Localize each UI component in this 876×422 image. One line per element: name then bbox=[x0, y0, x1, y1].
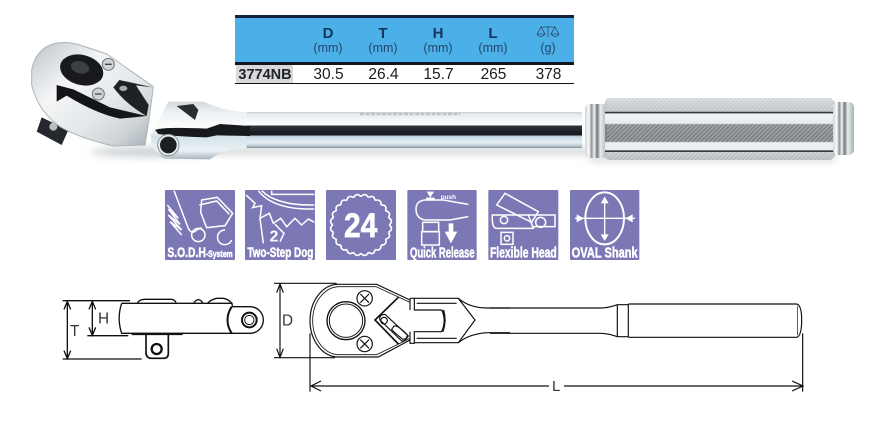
icon: Quick Release: Quick Release bbox=[410, 245, 475, 261]
icon: S.O.D.H-System bbox=[165, 190, 235, 260]
arrowhead right bbox=[792, 381, 803, 391]
icon: Quick Release: push bbox=[441, 194, 456, 201]
data row bbox=[238, 66, 561, 83]
column headers: L bbox=[488, 25, 498, 42]
shaft and grip outline bbox=[490, 304, 803, 392]
column headers: (mm) bbox=[313, 41, 343, 55]
label: L: L bbox=[552, 378, 560, 395]
soft shadow bbox=[90, 147, 835, 161]
spec table bbox=[235, 15, 574, 84]
column headers: (mm) bbox=[423, 41, 453, 55]
label: H: H bbox=[98, 311, 109, 328]
icon: Flexible Head: Flexible Head bbox=[490, 245, 557, 261]
diagram: top view with D and L dimensions bbox=[274, 283, 803, 395]
data row: 26.4 bbox=[368, 66, 399, 83]
column headers: D bbox=[323, 25, 334, 42]
photo: ratchet wrench bbox=[32, 42, 854, 161]
icon: Two-Step Dog: Two-Step Dog bbox=[247, 244, 313, 260]
dimension lines bbox=[63, 301, 142, 359]
icon: Two-Step Dog bbox=[245, 190, 315, 260]
icon: 24 teeth: 24 bbox=[344, 207, 377, 245]
ratchet body profile bbox=[119, 303, 263, 333]
feature icons bbox=[165, 190, 639, 261]
ratchet head outline bbox=[274, 283, 510, 392]
square drive bbox=[37, 117, 68, 145]
dimension line L bbox=[311, 385, 802, 387]
data row: 15.7 bbox=[423, 66, 454, 83]
column headers: (mm) bbox=[368, 41, 398, 55]
label: T: T bbox=[70, 323, 80, 340]
handle bbox=[585, 98, 854, 160]
data row: 3774NB bbox=[238, 67, 292, 83]
label: D: D bbox=[282, 312, 293, 329]
icon: Flexible Head bbox=[488, 190, 558, 261]
icon: balance scale bbox=[537, 26, 559, 37]
column headers: H bbox=[433, 25, 443, 42]
icon: OVAL Shank: OVAL Shank bbox=[572, 245, 638, 261]
column headers: (mm) bbox=[478, 41, 508, 55]
arrowhead left bbox=[311, 381, 321, 391]
head and joint bbox=[32, 42, 250, 159]
icon: OVAL Shank bbox=[570, 190, 639, 261]
data row: 30.5 bbox=[313, 66, 344, 83]
column headers: T bbox=[378, 25, 388, 42]
shaft bbox=[235, 112, 582, 148]
shaft yoke bbox=[151, 102, 247, 159]
column headers: (g) bbox=[540, 41, 556, 55]
icon: Quick Release bbox=[407, 190, 477, 261]
ratchet head bbox=[32, 42, 153, 146]
column headers bbox=[313, 25, 556, 55]
diagram: side view with T and H dimensions bbox=[63, 298, 263, 359]
icon: 24 teeth bbox=[326, 190, 396, 260]
icon: S.O.D.H-System: S.O.D.H-System bbox=[167, 244, 233, 260]
data row: 378 bbox=[536, 66, 561, 83]
square drive bbox=[146, 335, 168, 358]
icon: Two-Step Dog: 2 bbox=[270, 229, 279, 246]
data row: 265 bbox=[481, 66, 506, 83]
